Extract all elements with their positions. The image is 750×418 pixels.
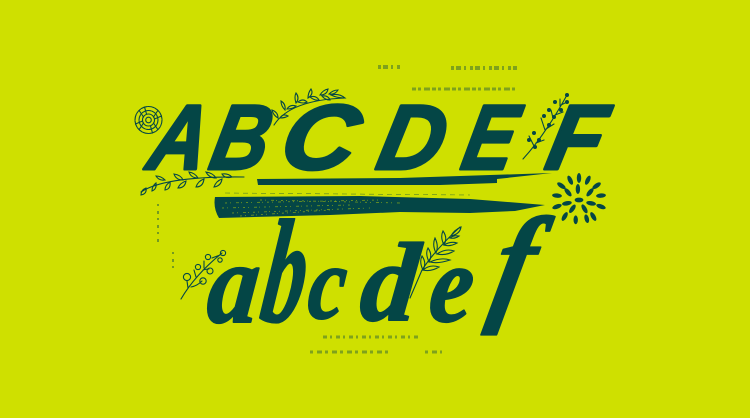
icon: rose outline bbox=[135, 106, 162, 134]
letter e: e bbox=[424, 224, 480, 345]
letter b: b bbox=[253, 191, 319, 354]
letter d: d bbox=[355, 221, 426, 345]
icon: laurel sprig top bbox=[272, 89, 345, 125]
faded caption fragments: top bbox=[378, 67, 517, 89]
icon: dark starburst bbox=[552, 173, 606, 224]
letter C: C bbox=[273, 86, 371, 189]
icon: wheat leaf bbox=[410, 227, 461, 298]
icon: berry sprig right bbox=[523, 93, 569, 159]
letter c: c bbox=[304, 227, 353, 341]
icon: laurel sprig left bbox=[141, 172, 244, 195]
uppercase letters bbox=[139, 86, 618, 190]
letter A: A bbox=[139, 87, 219, 189]
wide brush stroke bbox=[214, 193, 545, 218]
lowercase letters bbox=[202, 191, 561, 354]
faded caption fragments: left bbox=[158, 204, 173, 270]
letter B: B bbox=[203, 87, 281, 189]
letter a: a bbox=[202, 219, 266, 347]
brush underline bbox=[257, 173, 552, 185]
letter f: f bbox=[481, 192, 561, 336]
icon: berry sprig outline bbox=[181, 250, 226, 299]
letter F: F bbox=[539, 86, 618, 189]
letter E: E bbox=[455, 87, 529, 190]
letter D: D bbox=[370, 86, 457, 189]
faded caption fragments: bottom bbox=[310, 337, 442, 352]
